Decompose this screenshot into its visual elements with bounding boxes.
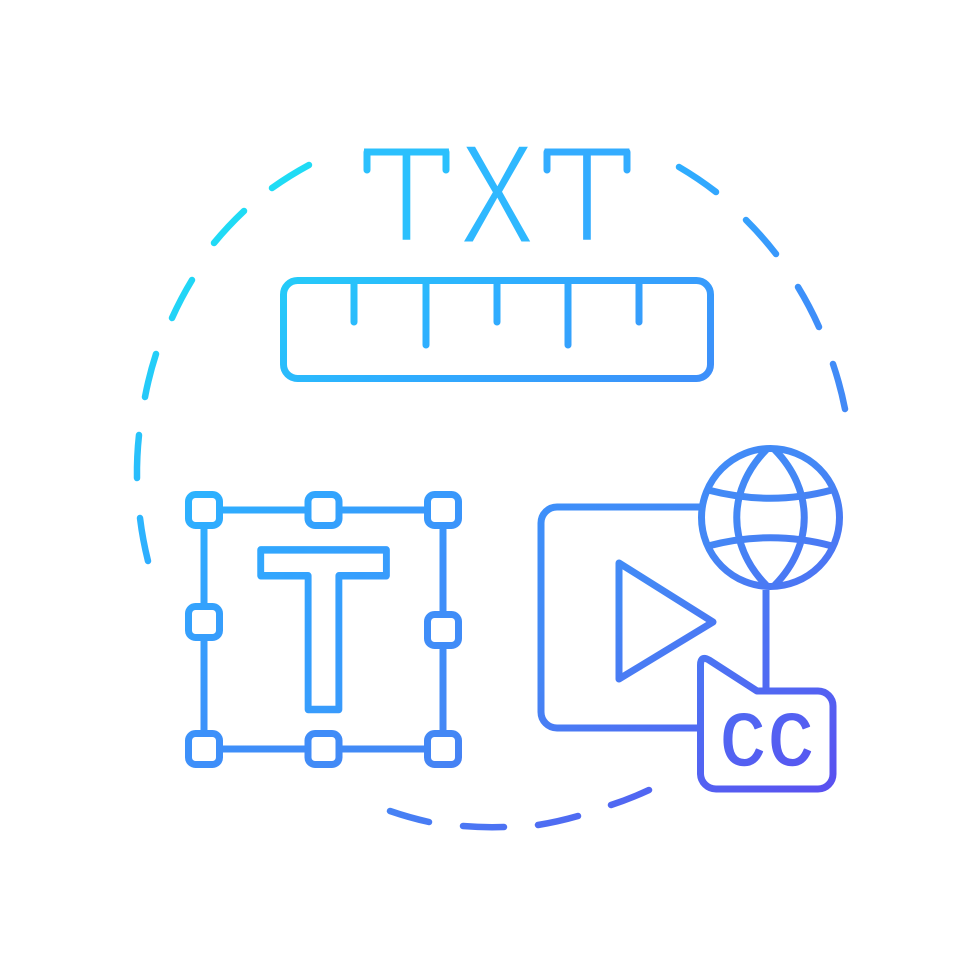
icon: globe [702, 448, 840, 586]
CC label: CC [720, 702, 814, 788]
icon: text selection box [188, 494, 458, 764]
letter T outline: T [258, 500, 389, 759]
connector line [762, 590, 770, 690]
heading: TXT: T [357, 115, 456, 274]
heading: TXT: X [459, 116, 535, 274]
icon: video player [541, 507, 713, 728]
heading: TXT [357, 115, 637, 274]
heading: TXT: T [537, 115, 637, 274]
dashed circle [137, 165, 845, 827]
selection handles [188, 494, 458, 764]
caption bubble [700, 658, 833, 789]
play triangle [619, 563, 713, 679]
icon: ruler [284, 280, 710, 378]
frame lines [204, 510, 443, 749]
